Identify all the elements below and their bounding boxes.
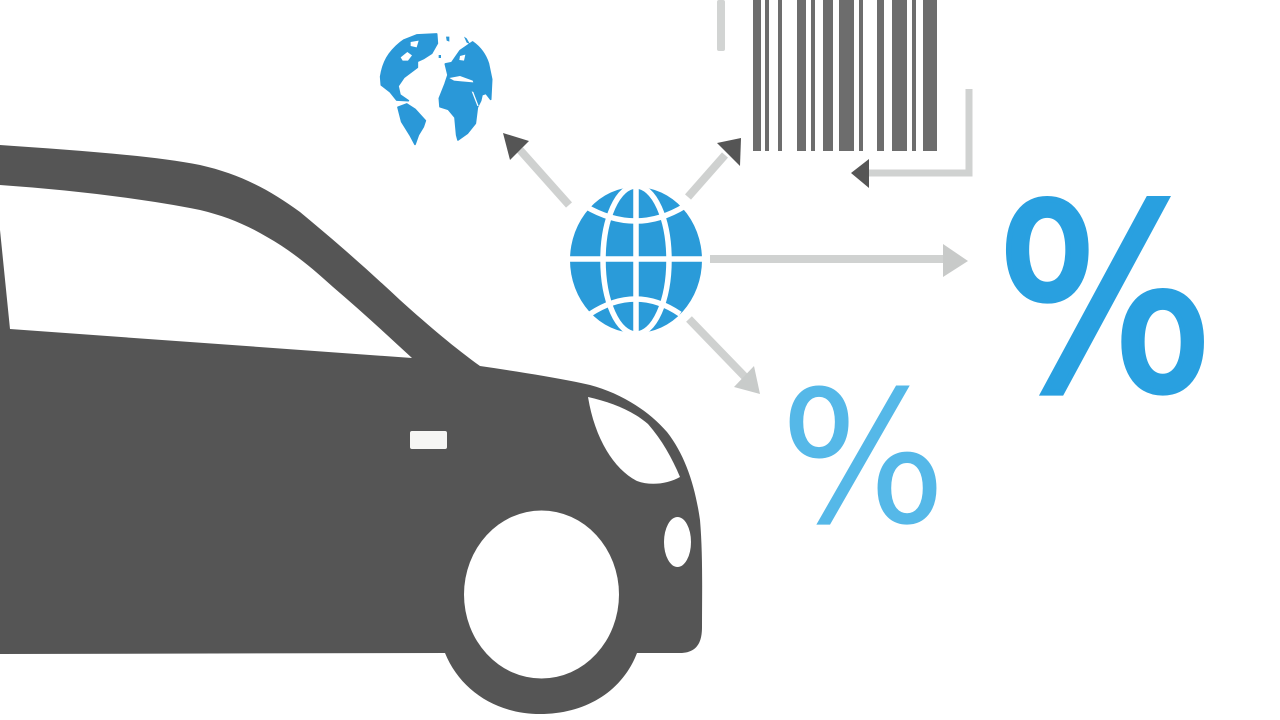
arrow: barcode scan bracket xyxy=(851,89,969,188)
car silhouette xyxy=(0,145,702,714)
arrow: to small percent xyxy=(689,319,760,394)
arrow: to barcode xyxy=(688,138,741,197)
large percent sign: % xyxy=(996,152,1214,450)
front wheel opening xyxy=(464,510,619,678)
side marker light xyxy=(664,517,691,567)
door handle xyxy=(410,431,447,449)
small percent sign: % xyxy=(780,352,946,566)
arrow: to world map xyxy=(503,133,569,205)
barcode frame corner, top left xyxy=(717,0,725,51)
icon: world map globe xyxy=(381,34,492,144)
arrow: to large percent xyxy=(710,244,968,277)
icon: blue grid globe xyxy=(568,185,704,335)
headlight xyxy=(588,397,680,484)
icon: barcode xyxy=(753,0,937,151)
